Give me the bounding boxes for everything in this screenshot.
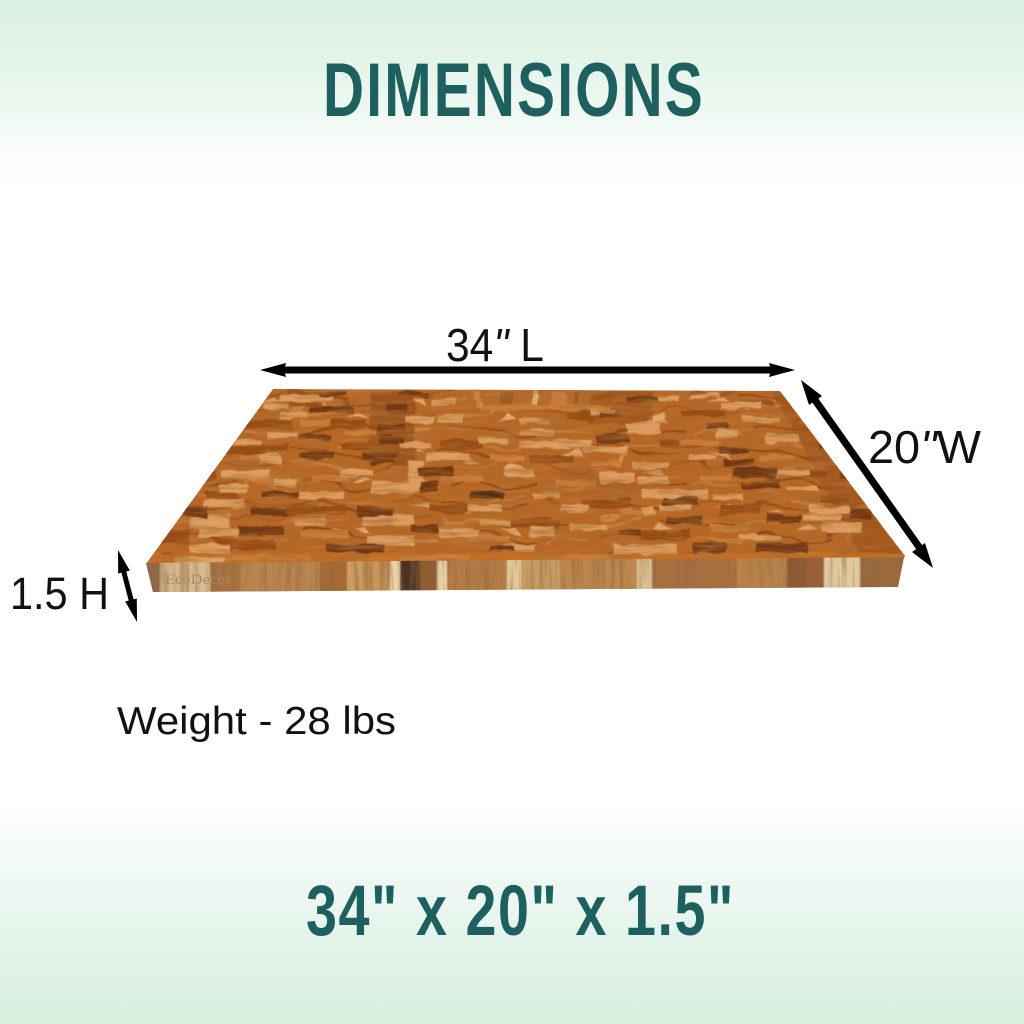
background: bottom green fade (0, 800, 1024, 1024)
light tiles: left half (175, 395, 535, 563)
board top surface (146, 389, 905, 564)
front edge staves (146, 557, 904, 592)
background: top green fade (0, 0, 1024, 190)
right border band (772, 391, 905, 556)
flowing end grain (153, 389, 904, 555)
arrow: height (118, 550, 137, 622)
dark column (370, 392, 415, 464)
mid light tiles (220, 405, 796, 560)
wood tiles (140, 390, 910, 564)
board front edge (146, 557, 904, 592)
cutting board (146, 389, 905, 592)
wood grain texture: dark (140, 385, 910, 570)
dark tiles (183, 392, 872, 552)
warm colour wash (140, 385, 910, 570)
weight text: Weight - 28 lbs (117, 700, 396, 743)
light tiles: right half (520, 395, 860, 553)
label: width: 20"W (868, 421, 982, 473)
mid dark tiles (150, 400, 850, 550)
label: length: 34" L (446, 319, 544, 371)
label: height: 1.5 H (10, 568, 109, 619)
wood grain texture: light (170, 390, 898, 561)
arrow: length (260, 363, 795, 377)
brand mark on board: EcoDecor (165, 572, 231, 588)
arrow: width (801, 380, 933, 568)
dimensions summary: 34" x 20" x 1.5" (306, 872, 735, 951)
title: DIMENSIONS (323, 48, 705, 133)
bottom border (140, 553, 910, 564)
notch (467, 390, 591, 408)
